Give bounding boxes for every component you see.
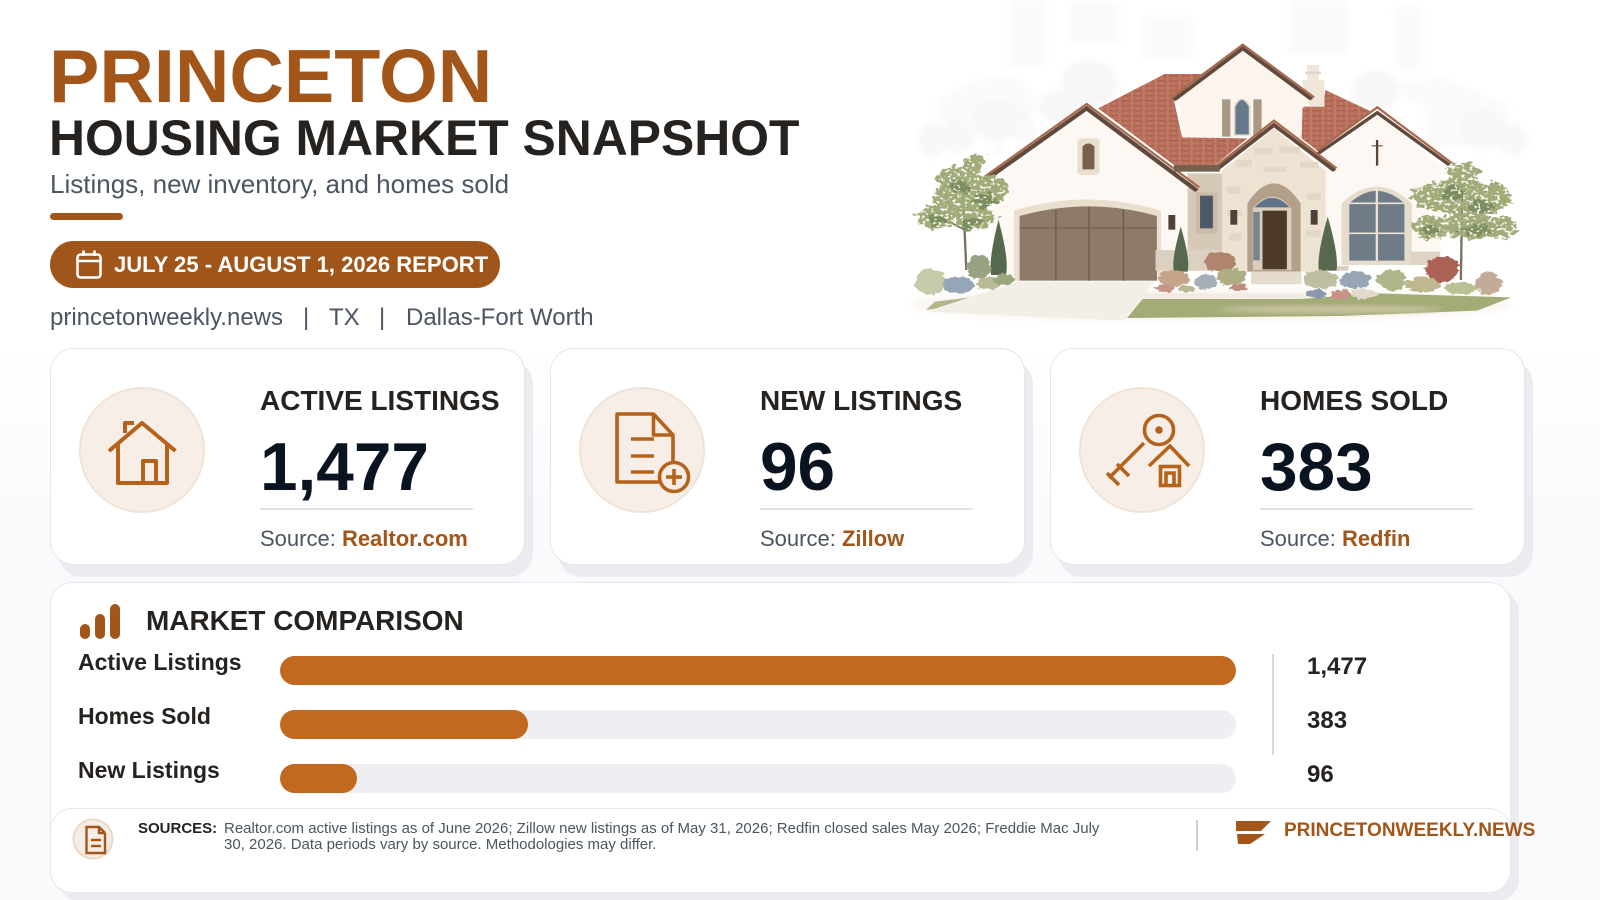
- right gable: [1323, 115, 1441, 267]
- icon: logo mark: [1236, 821, 1271, 844]
- middle tan wall: [1188, 173, 1224, 271]
- tagline: Listings, new inventory, and homes sold: [50, 169, 509, 199]
- panel: new listings: [550, 348, 1033, 577]
- driveway: [926, 282, 1155, 321]
- icon: document plus: [579, 387, 705, 513]
- location line: |: [303, 304, 309, 331]
- big window: [1341, 187, 1412, 265]
- value: 1,477: [260, 430, 429, 505]
- wall main left: [993, 112, 1197, 281]
- garage: [1014, 199, 1161, 281]
- dormer: [1175, 50, 1311, 137]
- icon: sources document: [72, 818, 114, 860]
- bar: homes sold: [280, 710, 1236, 739]
- panel: active listings: [50, 348, 533, 577]
- row label: homes sold: Homes Sold: [78, 703, 211, 729]
- accent rule: [50, 213, 123, 220]
- chimney: [1302, 65, 1325, 107]
- date pill: [50, 241, 500, 288]
- location line: princetonweekly.news: [50, 304, 283, 331]
- entry arch: [1247, 183, 1301, 272]
- panel: sources footer: [50, 808, 1511, 893]
- sources label: SOURCES:: [138, 820, 217, 836]
- icon: bars: [80, 604, 120, 639]
- heading: MARKET COMPARISON: [146, 605, 464, 636]
- subtitle heading: HOUSING MARKET SNAPSHOT: [49, 110, 799, 166]
- icon: calendar: [76, 250, 102, 279]
- icon: house: [79, 387, 205, 513]
- cypress: [991, 217, 1337, 275]
- row label: active listings: Active Listings: [78, 649, 242, 675]
- roof: [1098, 74, 1247, 165]
- left gable roof trim: [986, 108, 1197, 191]
- bar: new listings: [280, 764, 1236, 793]
- lanterns: [1168, 210, 1318, 230]
- icon: key and house: [1079, 387, 1205, 513]
- value: 96: [760, 430, 835, 505]
- brand name: PRINCETONWEEKLY.NEWS: [1284, 820, 1535, 841]
- sources text: [224, 820, 1100, 853]
- label: NEW LISTINGS: [760, 385, 962, 416]
- value: 383: [1260, 430, 1373, 505]
- location line: |: [379, 304, 385, 331]
- trees: [917, 153, 1518, 280]
- sources text: Realtor.com active listings as of June 2026; Zillow new listings as of May 31, 2026; Redfin closed sales May 2026; Freddie Mac July: [224, 820, 1099, 837]
- value: new listings: 96: [1307, 761, 1334, 788]
- bar: active listings: [280, 656, 1236, 685]
- side window: [1196, 193, 1217, 233]
- label: HOMES SOLD: [1260, 385, 1448, 416]
- label: ACTIVE LISTINGS: [260, 385, 500, 416]
- date text: JULY 25 - AUGUST 1, 2026 REPORT: [114, 252, 488, 276]
- sources text: 30, 2026. Data periods vary by source. Methodologies may differ.: [224, 836, 656, 853]
- source: Source: Realtor.com: [260, 526, 468, 551]
- lawn: [1127, 293, 1511, 318]
- location line: [50, 304, 594, 331]
- location line: TX: [329, 304, 360, 331]
- value: active listings: 1,477: [1307, 653, 1367, 680]
- plants: [915, 252, 1501, 299]
- center stone gable: [1222, 128, 1325, 272]
- panel: homes sold: [1050, 348, 1533, 577]
- title: PRINCETON: [49, 34, 492, 118]
- row label: new listings: New Listings: [78, 757, 220, 783]
- illustration: house: [912, 43, 1520, 321]
- faint background neighbourhood: [918, 0, 1527, 160]
- left gable window: [1077, 138, 1099, 175]
- source: Source: Redfin: [1260, 526, 1410, 551]
- value: homes sold: 383: [1307, 707, 1347, 734]
- source: Source: Zillow: [760, 526, 904, 551]
- ground fade: [912, 290, 1509, 320]
- location line: Dallas-Fort Worth: [406, 304, 594, 331]
